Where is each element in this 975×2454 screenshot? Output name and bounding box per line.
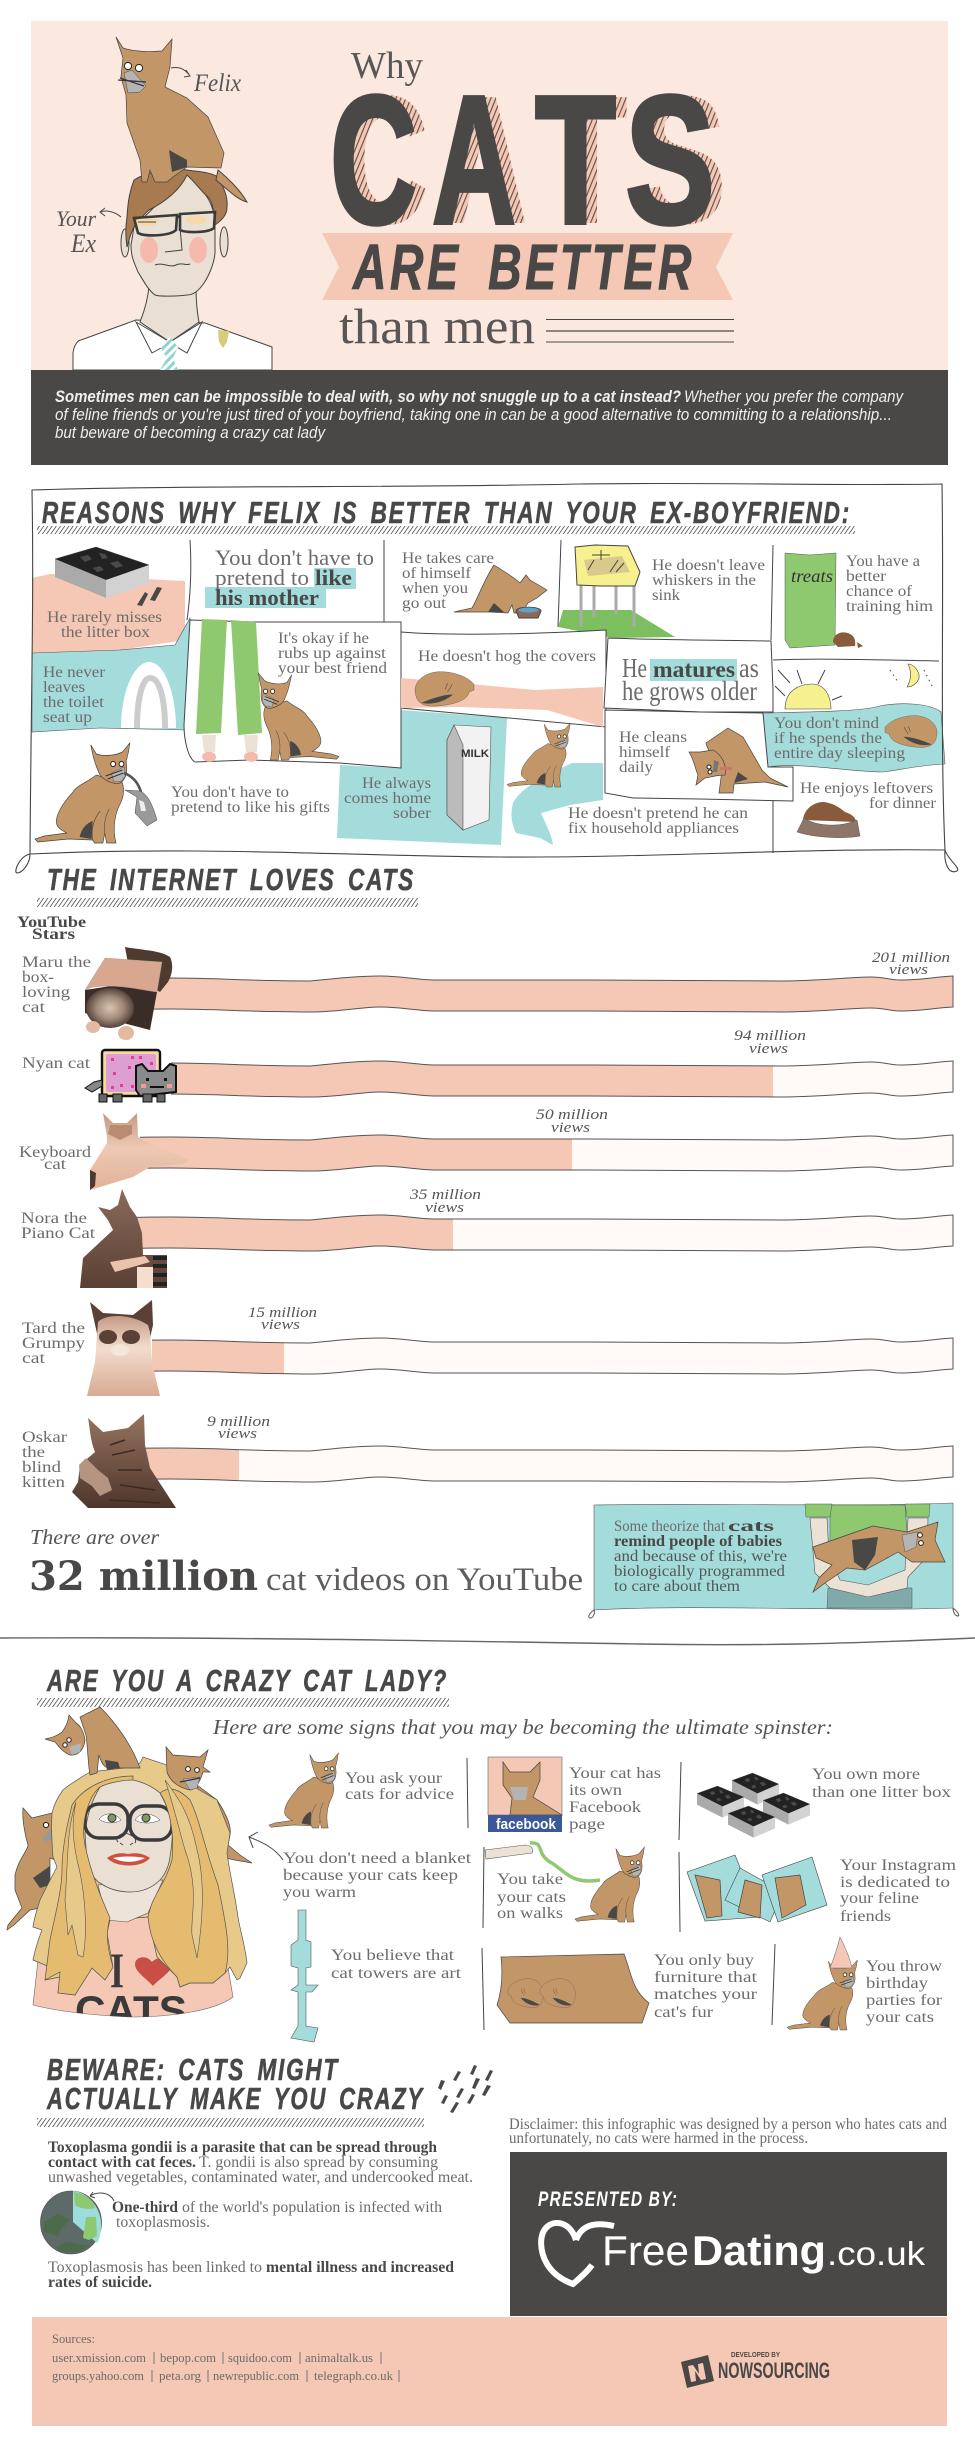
- stat: 32 million cat videos: cat videos on YouTube: [266, 1562, 583, 1598]
- sign: ask cats for advice: You ask your: [345, 1770, 443, 1787]
- panel: treats: [785, 553, 934, 648]
- panel: treats: treats: [791, 566, 833, 586]
- sign: facebook page: its own: [569, 1782, 622, 1799]
- panel: reasons why Felix is better: [16, 483, 958, 873]
- cat on top of head: [45, 1707, 140, 1775]
- logo: FreeDating.co.uk: Dating: [692, 2227, 826, 2274]
- title: CATS: T: [547, 57, 628, 262]
- panel: whiskers in the sink: sink: [652, 587, 680, 604]
- panel: like his mother: his mother: [215, 585, 319, 610]
- chart: Nora the Piano Cat: 35 million: [409, 1187, 481, 1203]
- sources: squidoo.com: [228, 2350, 292, 2365]
- intro band: but beware of becoming a crazy cat lady: [55, 423, 326, 442]
- cat on left side: [7, 1808, 68, 1930]
- panel: like his mother: like: [315, 565, 352, 590]
- panel: whiskers in the sink: [558, 545, 765, 638]
- panel: cleans himself: daily: [619, 759, 653, 776]
- sign: facebook page: page: [569, 1816, 605, 1833]
- title: CATS: C: [342, 57, 429, 262]
- chart: Maru the box-loving cat: Maru the: [22, 954, 91, 971]
- panel: best friend: It's okay if he: [278, 630, 369, 647]
- chart: Keyboard cat: Keyboard: [19, 1144, 91, 1161]
- callout: cats remind people of babies: biologically programmed: [614, 1563, 785, 1580]
- panel: cleans himself: He cleans: [619, 729, 687, 746]
- panel: whiskers in the sink: whiskers in the: [652, 572, 756, 589]
- chart: Nyan cat: Nyan cat: [22, 1055, 91, 1072]
- callout: cats remind people of babies: [589, 1503, 959, 1618]
- sign: ask cats for advice: cats for advice: [345, 1786, 454, 1803]
- panel: household appliances: fix household appliances: [568, 820, 739, 837]
- chart: Maru the box-loving cat: views: [889, 962, 928, 978]
- panel: takes care of himself: go out: [402, 595, 447, 612]
- logo: FreeDating.co.uk: Free: [602, 2227, 689, 2274]
- sign: more than one litter box: [697, 1766, 951, 1838]
- sign: instagram: your feline: [840, 1890, 919, 1907]
- sign: birthday parties: birthday: [866, 1975, 928, 1992]
- chart: Tard the Grumpy cat: [22, 1300, 953, 1396]
- chart: Maru the box-loving cat: 201 million: [872, 950, 950, 966]
- section heading: beware: [37, 2052, 425, 2127]
- chart: Nora the Piano Cat: [21, 1187, 953, 1288]
- sign: walks: your cats: [497, 1889, 566, 1906]
- sign: walks: You take: [497, 1871, 563, 1888]
- chart: Keyboard cat: 50 million: [536, 1107, 608, 1123]
- chart: Oskar the blind kitten: Oskar: [22, 1429, 68, 1446]
- title: CATS: S: [637, 57, 727, 262]
- chart: Tard the Grumpy cat: cat: [22, 1350, 46, 1367]
- text: disclaimer: [509, 2116, 947, 2147]
- title: CATS: S: [625, 57, 715, 262]
- panel: treats: better: [846, 568, 887, 585]
- panel: presented by: [510, 2152, 947, 2316]
- panel: toilet seat: leaves: [43, 679, 85, 696]
- label: Felix: Felix: [193, 70, 241, 97]
- illustration: crazy cat lady: [7, 1707, 252, 2034]
- panel: toilet seat: the toilet: [43, 694, 105, 711]
- illustration: crazy cat lady: I: [110, 1942, 124, 1998]
- stat: 32 million cat videos: There are over: [30, 1525, 160, 1549]
- chart: Nyan cat: [22, 1028, 953, 1105]
- panel: best friend: [184, 619, 401, 768]
- sign: more than one litter box: You own more: [812, 1766, 920, 1783]
- sign: no blanket: because your cats keep: [283, 1867, 458, 1884]
- panel: hog the covers: [401, 630, 606, 727]
- intro band: of feline friends or you're just tired of your boyfriend, taking one in can be a good alternative to committing to a relationship...: [55, 405, 892, 424]
- text: linked to mental illness: Toxoplasmosis has been linked to: [48, 2259, 262, 2276]
- text: toxoplasma gondii: unwashed vegetables, contaminated water, and undercooked meat.: [48, 2169, 473, 2186]
- sign: walks: [483, 1843, 644, 1928]
- youtube stars heading: YouTube: [17, 914, 86, 931]
- sign: cat towers: cat towers are art: [331, 1965, 462, 1982]
- label: Your Ex: [56, 206, 121, 258]
- sign: no blanket: [249, 1832, 472, 1901]
- chart: Maru the box-loving cat: loving: [22, 984, 70, 1001]
- panel: litter box: the litter box: [61, 624, 150, 641]
- title: CATS: A: [444, 57, 528, 262]
- sign: furniture: cat's fur: [654, 2004, 714, 2021]
- panel: best friend: your best friend: [278, 660, 387, 677]
- logo: nowsourcing: [681, 2352, 830, 2388]
- sign: facebook page: Your cat has: [569, 1765, 661, 1782]
- sources: user.xmission.com: [52, 2350, 146, 2365]
- panel: like his mother: You don't have to: [215, 545, 374, 570]
- chart: Keyboard cat: views: [551, 1120, 590, 1136]
- panel: litter box: [32, 547, 185, 653]
- chart: Nora the Piano Cat: Nora the: [21, 1210, 87, 1227]
- title: CATS: T: [535, 57, 616, 262]
- sign: birthday parties: your cats: [866, 2009, 934, 2026]
- title: CATS: A: [432, 57, 516, 262]
- logo: FreeDating.co.uk: .co.uk: [827, 2235, 926, 2272]
- sign: birthday parties: parties for: [866, 1992, 943, 2009]
- sources: animaltalk.us: [305, 2350, 373, 2365]
- text: toxoplasma gondii: contact with cat feces.: [48, 2154, 196, 2171]
- panel: always comes home sober: MILK: [461, 748, 489, 760]
- sources: Sources:: [52, 2331, 95, 2346]
- footer: [32, 2317, 947, 2426]
- chart: Oskar the blind kitten: [22, 1414, 953, 1508]
- ribbon: are better: ARE BETTER: [352, 231, 695, 303]
- text: toxoplasma gondii: T. gondii is also spread by consuming: [199, 2154, 438, 2171]
- chart: Maru the box-loving cat: cat: [22, 999, 46, 1016]
- sources: [52, 2331, 399, 2383]
- chart: Tard the Grumpy cat: Grumpy: [22, 1335, 85, 1352]
- sign: furniture: You only buy: [654, 1952, 754, 1969]
- panel: best friend: rubs up against: [278, 645, 387, 662]
- sign: facebook page: [488, 1757, 681, 1840]
- title: CATS: C: [330, 57, 417, 262]
- youtube stars heading: Stars: [32, 926, 75, 943]
- section heading: beware: BEWARE: CATS MIGHT: [47, 2052, 339, 2087]
- chart: Keyboard cat: [19, 1107, 953, 1190]
- chart: Nyan cat: 94 million: [734, 1028, 806, 1044]
- sign: instagram: [679, 1852, 957, 1932]
- panel: sleeping: You don't mind: [774, 715, 879, 732]
- panel: leftovers: for dinner: [869, 795, 937, 812]
- callout: cats remind people of babies: and because of this, we're: [614, 1548, 787, 1565]
- text: disclaimer: unfortunately, no cats were harmed in the process.: [509, 2130, 808, 2147]
- frame: [16, 483, 958, 873]
- chart: Nyan cat: views: [749, 1041, 788, 1057]
- panel: leftovers: [797, 780, 937, 838]
- text: linked to mental illness: [48, 2259, 454, 2291]
- intro band: [31, 370, 948, 465]
- panel: takes care of himself: when you: [402, 580, 468, 597]
- text: toxoplasma gondii: [48, 2139, 473, 2186]
- panel: matures: matures: [653, 657, 735, 682]
- panel: matures: he grows older: [622, 676, 757, 706]
- panel: cleans himself: himself: [619, 744, 671, 761]
- text: linked to mental illness: mental illness and increased: [266, 2259, 454, 2276]
- icon: paw prints: [438, 2065, 493, 2113]
- panel: cleans himself: [605, 710, 793, 801]
- panel: always comes home sober: comes home: [344, 790, 431, 807]
- sign: instagram: is dedicated to: [840, 1874, 950, 1891]
- label: Your Ex: Ex: [70, 229, 96, 258]
- title: than men: than men: [339, 298, 535, 354]
- sign: furniture: furniture that: [654, 1969, 758, 1986]
- chart: Nora the Piano Cat: Piano Cat: [21, 1225, 96, 1242]
- chart: Oskar the blind kitten: blind: [22, 1459, 61, 1476]
- chart: Oskar the blind kitten: 9 million: [207, 1414, 270, 1430]
- text: disclaimer: Disclaimer: this infographic was designed by a person who hates cats and: [509, 2116, 947, 2133]
- sign: no blanket: you warm: [283, 1884, 357, 1901]
- panel: toilet seat: seat up: [43, 709, 92, 726]
- panel: takes care of himself: He takes care: [402, 550, 494, 567]
- sources: newrepublic.com: [213, 2368, 299, 2383]
- chart: Keyboard cat: cat: [44, 1156, 67, 1173]
- panel: toilet seat: He never: [43, 664, 106, 681]
- panel: always comes home sober: sober: [393, 805, 432, 822]
- text: toxoplasma gondii: Toxoplasma gondii is a parasite that can be spread through: [48, 2139, 437, 2156]
- sign: no blanket: You don't need a blanket: [283, 1850, 472, 1867]
- chart: Tard the Grumpy cat: views: [261, 1317, 300, 1333]
- sign: instagram: Your Instagram: [840, 1857, 957, 1874]
- chart: Tard the Grumpy cat: 15 million: [248, 1305, 317, 1321]
- sign: more than one litter box: than one litter box: [812, 1784, 951, 1801]
- icon: heart logo: [541, 2223, 614, 2284]
- sign: facebook page: Facebook: [569, 1799, 641, 1816]
- chart: Nora the Piano Cat: views: [425, 1200, 464, 1216]
- panel: litter box: He rarely misses: [47, 609, 162, 626]
- title: CATS: [330, 57, 727, 262]
- chart: Tard the Grumpy cat: Tard the: [22, 1320, 85, 1337]
- sign: birthday parties: [772, 1937, 943, 2030]
- section heading: the internet loves cats: [37, 862, 418, 907]
- panel: treats: training him: [846, 598, 934, 615]
- callout: cats remind people of babies: remind people of babies: [614, 1533, 782, 1550]
- panel: leftovers: He enjoys leftovers: [800, 780, 933, 797]
- callout: cats remind people of babies: cats: [728, 1518, 774, 1535]
- panel: treats: You have a: [846, 553, 920, 570]
- section heading: crazy cat lady: ARE YOU A CRAZY CAT LADY?: [46, 1663, 448, 1698]
- chart: Oskar the blind kitten: views: [218, 1426, 257, 1442]
- illustration: crazy cat lady: CATS: [75, 1987, 187, 2034]
- sources: groups.yahoo.com: [52, 2368, 144, 2383]
- section heading: the internet loves cats: THE INTERNET LOVES CATS: [47, 862, 415, 897]
- panel: household appliances: He doesn't pretend he can: [568, 805, 748, 822]
- section heading: beware: ACTUALLY MAKE YOU CRAZY: [46, 2081, 425, 2116]
- panel: sleeping: [763, 659, 945, 772]
- text: one-third: of the world's population is infected with: [182, 2199, 442, 2216]
- panel: always comes home sober: [337, 710, 507, 845]
- panel: like his mother: pretend to: [215, 565, 309, 590]
- chart: globe one-third: [40, 2191, 114, 2254]
- callout: cats remind people of babies: Some theorize that: [614, 1518, 726, 1535]
- panel: sleeping: entire day sleeping: [774, 745, 905, 762]
- sign: furniture: [482, 1948, 758, 2030]
- text: one-third: [112, 2199, 442, 2231]
- panel: whiskers in the sink: He doesn't leave: [652, 557, 765, 574]
- man illustration: your ex: [56, 37, 272, 370]
- panel: household appliances: [507, 723, 748, 845]
- youtube stars heading: [17, 914, 86, 943]
- panel: takes care of himself: [402, 550, 547, 618]
- panel: presented by: PRESENTED BY:: [538, 2188, 678, 2211]
- stat: 32 million cat videos: [29, 1525, 583, 1600]
- cat: Felix: [116, 37, 247, 202]
- section heading: crazy cat lady: [37, 1663, 449, 1707]
- sources: peta.org: [159, 2368, 201, 2383]
- cat on right shoulder body: [197, 1785, 252, 1863]
- intro band: Whether you prefer the company: [684, 387, 904, 406]
- panel: matures: He: [622, 653, 647, 683]
- panel: always comes home sober: He always: [362, 775, 431, 792]
- chart: Maru the box-loving cat: box-: [22, 969, 54, 986]
- header panel: [31, 21, 948, 370]
- sources: telegraph.co.uk: [314, 2368, 393, 2383]
- stat: 32 million cat videos: 32 million: [29, 1553, 258, 1600]
- sign: furniture: matches your: [654, 1986, 758, 2003]
- logo: FreeDating.co.uk: [602, 2227, 926, 2274]
- chart: Oskar the blind kitten: the: [22, 1444, 45, 1461]
- sign: cat towers: [291, 1910, 462, 2042]
- logo: nowsourcing: DEVELOPED BY: [731, 2352, 780, 2359]
- panel: hog the covers: He doesn't hog the covers: [418, 648, 596, 665]
- panel: gifts: You don't have to: [171, 784, 289, 801]
- sign: ask cats for advice: [269, 1753, 468, 1828]
- sources: bepop.com: [160, 2350, 216, 2365]
- panel: sleeping: if he spends the: [774, 730, 882, 747]
- callout: cats remind people of babies: to care about them: [614, 1578, 741, 1595]
- sign: instagram: friends: [840, 1908, 891, 1925]
- chart: Oskar the blind kitten: kitten: [22, 1474, 65, 1491]
- text: linked to mental illness: rates of suicide.: [48, 2274, 152, 2291]
- logo: nowsourcing: NOWSOURCING: [718, 2358, 830, 2383]
- sign: walks: on walks: [497, 1905, 563, 1922]
- cat on right shoulder head: [166, 1747, 210, 1790]
- panel: matures: [604, 638, 773, 712]
- sign: facebook page: facebook: [496, 1816, 557, 1833]
- sign: birthday parties: You throw: [866, 1958, 943, 1975]
- panel: matures: as: [739, 653, 759, 683]
- panel: treats: chance of: [846, 583, 913, 600]
- label: Your Ex: Your: [56, 206, 96, 231]
- intro band: Sometimes men can be impossible to deal with, so why not snuggle up to a cat instead?: [55, 387, 682, 406]
- chart: Maru the box-loving cat: [22, 947, 953, 1040]
- panel: gifts: pretend to like his gifts: [171, 799, 330, 816]
- text: one-third: toxoplasmosis.: [116, 2214, 210, 2231]
- panel: toilet seat: [32, 618, 190, 732]
- sign: cat towers: You believe that: [331, 1947, 455, 1964]
- panel: gifts: [35, 743, 330, 843]
- label: Felix: [171, 67, 241, 97]
- panel: takes care of himself: of himself: [402, 565, 472, 582]
- title: Why: Why: [351, 45, 423, 87]
- subheading: signs: Here are some signs that you may be becoming the ultimate spinster:: [212, 1715, 833, 1739]
- panel: like his mother: [187, 540, 773, 853]
- text: one-third: One-third: [112, 2199, 178, 2216]
